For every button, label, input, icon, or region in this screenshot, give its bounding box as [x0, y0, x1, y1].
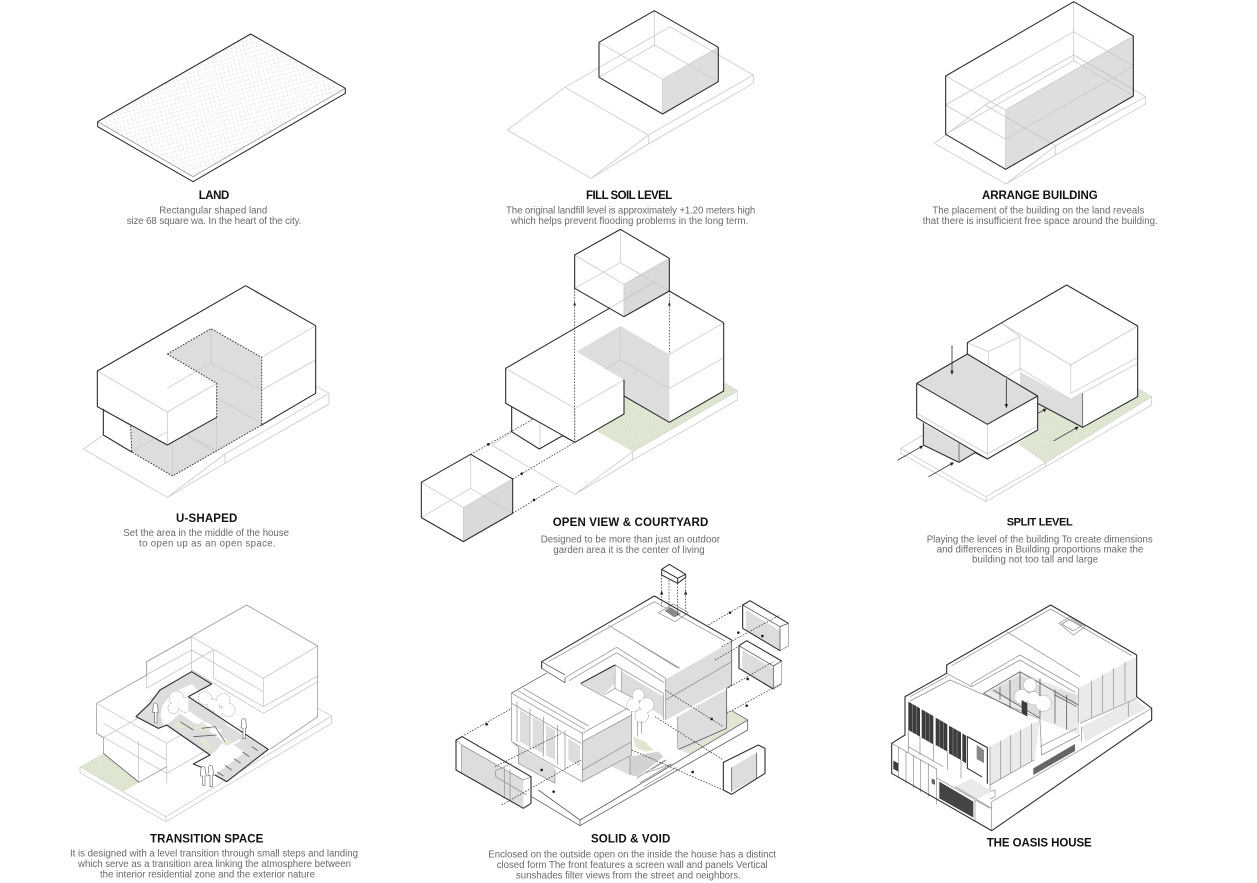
description: arrange building: The placement of the building on the land reveals	[932, 206, 1144, 216]
description: split level	[927, 534, 1153, 566]
description: fill soil level: which helps prevent flooding problems in the long term.	[510, 216, 748, 227]
icon: courtyard trees	[168, 691, 235, 717]
description: solid and void: Enclosed on the outside open on the inside the house has a distinct	[488, 850, 776, 861]
description: solid and void	[488, 850, 776, 881]
description: transition space: which serve as a transition area linking the atmosphere between	[77, 859, 351, 870]
heading: fill soil level: FILL SOIL LEVEL	[586, 190, 672, 202]
right block panels	[1078, 657, 1147, 742]
diagram: land plot	[98, 34, 345, 182]
heading: u-shaped: U-SHAPED	[176, 513, 237, 525]
box: left screen wall	[456, 737, 531, 808]
box: upper right panel	[743, 601, 788, 651]
icon: people	[153, 703, 247, 787]
description: open view and courtyard	[541, 535, 721, 556]
box: front right panel	[723, 745, 765, 794]
description: land: size 68 square wa. In the heart of the city.	[127, 216, 301, 227]
description: solid and void: sunshades filter views from the street and neighbors.	[516, 870, 741, 881]
description: open view and courtyard: garden area it is the center of living	[553, 545, 705, 556]
description: fill soil level	[506, 206, 755, 227]
sunshade screens	[908, 702, 990, 808]
panel: solid and void	[456, 564, 788, 881]
description: split level: Playing the level of the building To create dimensions	[927, 534, 1153, 545]
description: land	[127, 206, 301, 227]
description: u-shaped: Set the area in the middle of the house	[123, 528, 289, 539]
diagram: final house axonometric	[892, 605, 1152, 831]
description: split level: building not too tall and large	[972, 555, 1098, 566]
heading: the oasis house: THE OASIS HOUSE	[987, 838, 1092, 850]
panel: u-shaped	[83, 286, 329, 550]
left block panels	[990, 720, 1040, 799]
front wall and gate	[892, 708, 1152, 831]
description: transition space: the interior residential zone and the exterior nature	[100, 869, 315, 880]
heading: open view and courtyard: OPEN VIEW & COURTYARD	[553, 517, 708, 529]
icon: courtyard tree	[627, 689, 654, 737]
description: u-shaped	[123, 528, 289, 550]
walkway in local coordinates	[136, 672, 268, 787]
description: transition space	[70, 849, 358, 880]
block: upper volume	[512, 596, 732, 782]
heading: transition space: TRANSITION SPACE	[150, 834, 264, 846]
panel: land	[98, 34, 345, 227]
diagram: transition walkway	[80, 605, 332, 822]
description: solid and void: closed form The front features a screen wall and panels Vertical	[497, 860, 768, 871]
description: open view and courtyard: Designed to be more than just an outdoor	[541, 535, 721, 546]
description: fill soil level: The original landfill level is approximately +1.20 meters high	[506, 206, 755, 216]
description: u-shaped: to open up as an open space.	[139, 538, 276, 550]
box: middle right panel	[739, 641, 782, 689]
description: transition space: It is designed with a level transition through small steps and landing	[70, 849, 358, 860]
panel: arrange building	[923, 2, 1158, 227]
diagram: raised soil with box	[507, 11, 753, 178]
description: arrange building: that there is insufficient free space around the building.	[923, 216, 1158, 227]
diagram: u-shaped massing	[83, 286, 329, 497]
heading: land: LAND	[199, 190, 229, 202]
panel: split level	[898, 285, 1153, 566]
description: land: Rectangular shaped land	[159, 206, 267, 216]
panel: transition space	[70, 605, 358, 880]
block: left volume	[512, 673, 677, 787]
heading: solid and void: SOLID & VOID	[591, 834, 670, 846]
diagram: split level massing	[898, 285, 1152, 502]
description: split level: and differences in Building proportions make the	[937, 544, 1143, 556]
diagram: exploded solid and void	[456, 564, 788, 826]
diagram: building volume on land	[934, 2, 1146, 184]
diagram: courtyard massing with subtracted boxes	[421, 229, 737, 542]
panel: fill soil level	[506, 11, 755, 227]
description: arrange building	[923, 206, 1158, 227]
panel: open view and courtyard	[421, 229, 737, 556]
heading: arrange building: ARRANGE BUILDING	[982, 190, 1098, 202]
heading: split level: SPLIT LEVEL	[1007, 517, 1073, 529]
panel: the oasis house	[892, 605, 1152, 850]
courtyard interior	[983, 672, 1080, 735]
icon: chimney box	[662, 564, 686, 583]
